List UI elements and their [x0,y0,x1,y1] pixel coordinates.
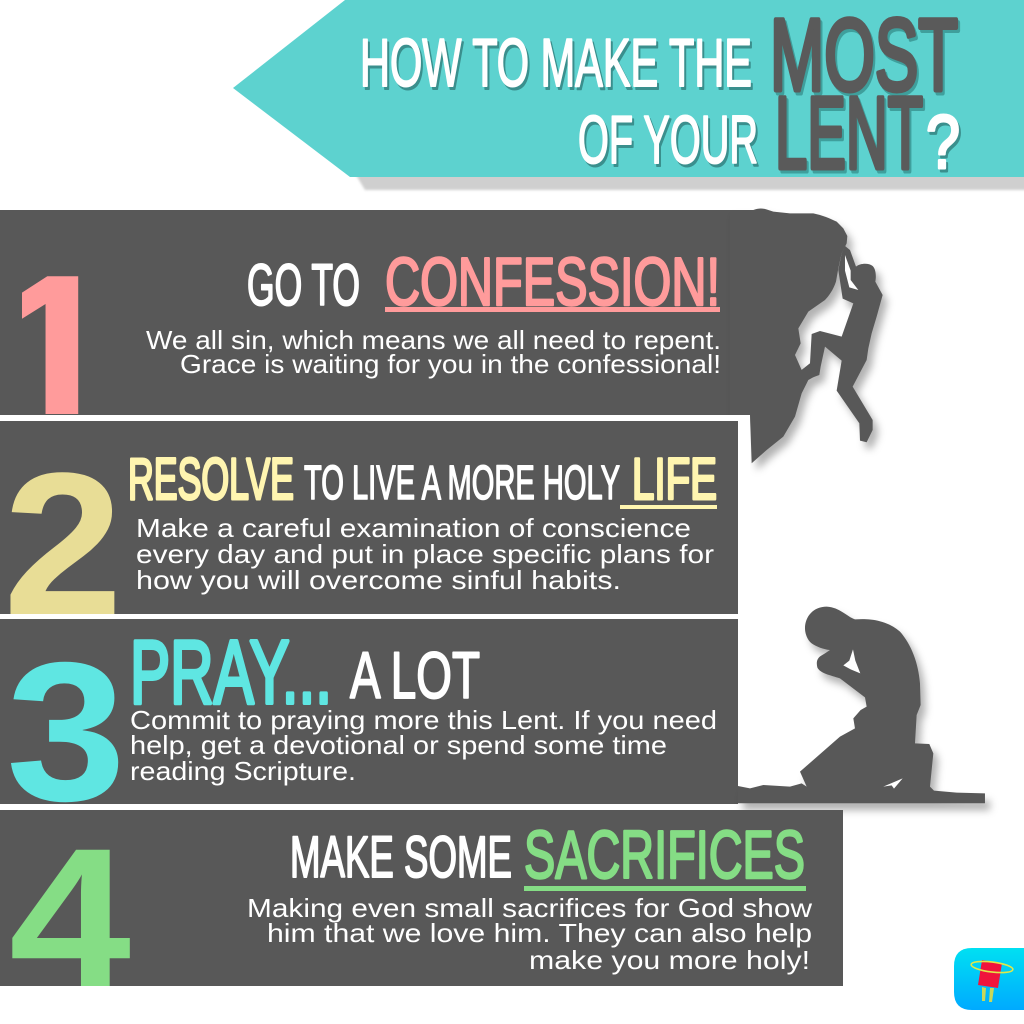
title line 2 shadow: OF YOUR [580,105,760,181]
silhouette [738,607,985,803]
gap under knee [883,778,903,789]
body text line 1: Commit to praying more this Lent. If you need [130,705,717,735]
heading: confession: CONFESSION! [385,244,720,320]
heading: a lot: A LOT [350,638,480,712]
white gap around panel 2 [0,415,750,617]
logo background [954,948,1024,1010]
number 4: 4 [9,807,131,1024]
title line 2: OF YOUR [578,102,758,178]
body text line 3: reading Scripture. [130,756,356,786]
logo popsicle sticks [982,987,994,1002]
panel 4 [0,807,843,1024]
body text line 2: every day and put in place specific plans for [136,539,714,569]
title [360,0,962,193]
logo popsicle [978,960,1002,988]
body text line 2: Grace is waiting for you in the confessional! [180,349,721,379]
body text line 3: how you will overcome sinful habits. [136,565,621,595]
body text line 1: Make a careful examination of conscience [136,513,691,543]
underline [524,886,806,891]
body text line 1: We all sin, which means we all need to repent. [146,325,721,355]
heading: life: LIFE [632,447,717,512]
panel 3 background [0,619,738,804]
cliff [730,208,847,463]
panel 3 [0,619,738,842]
banner shadow [350,165,1024,190]
number 2: 2 [3,431,123,658]
panel 1 content [0,226,721,491]
icon: kneeling praying man [738,607,985,803]
icon: logo [954,948,1024,1010]
heading: sacrifices: SACRIFICES [524,817,805,893]
panel 1 background [0,210,760,415]
panel 4 background [0,810,843,986]
body text line 3: make you more holy! [529,945,810,975]
logo halo [971,959,1013,975]
underline [620,505,717,509]
number 3: 3 [6,621,126,842]
panel 2 [0,421,738,658]
body text line 2: help, get a devotional or spend some time [130,730,667,760]
heading: resolve: RESOLVE [128,447,294,512]
heading: make some: MAKE SOME [290,825,512,890]
panel 2 background [0,421,738,614]
underline [385,307,720,312]
heading: pray: PRAY... [130,623,332,723]
title line 1 shadow: HOW TO MAKE THE [362,28,754,104]
banner arrow [233,0,1024,177]
body text line 2: him that we love him. They can also help [267,918,812,948]
title line 1: HOW TO MAKE THE [360,25,752,101]
climber [802,246,883,442]
icon: cliff and climber [730,208,883,463]
heading: go to: GO TO [247,253,360,318]
body text line 1: Making even small sacrifices for God show [247,893,812,923]
question mark: ? [926,100,960,185]
question mark shadow: ? [928,103,962,188]
gap between arm and body [845,255,858,290]
gap between arm and chest [843,649,860,673]
heading: to live: TO LIVE A MORE HOLY [304,457,620,510]
